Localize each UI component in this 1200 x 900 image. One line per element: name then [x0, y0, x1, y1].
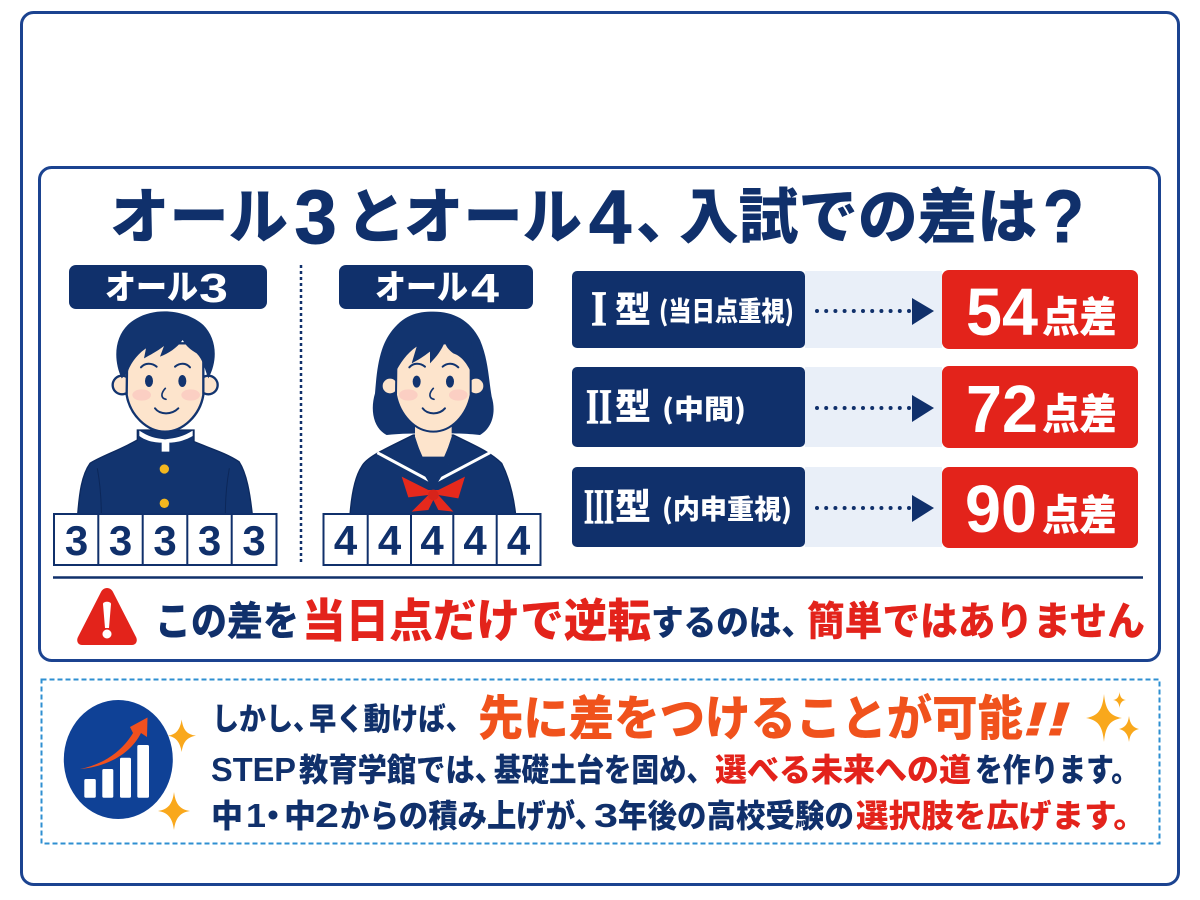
grade boxes: 4 4 4 4 4: 4 [420, 517, 444, 564]
grade boxes: 3 3 3 3 3: 3 [109, 517, 132, 564]
row: type I, 54 point gap: 型 [615, 281, 651, 333]
row: type I, 54 point gap: 54 [966, 275, 1038, 350]
student: all 3 [54, 260, 276, 565]
row: type I, 54 point gap [572, 270, 1138, 350]
grade boxes: 3 3 3 3 3: 3 [153, 517, 177, 564]
label: all 4 [339, 260, 533, 311]
grade boxes: 3 3 3 3 3: 3 [198, 517, 221, 564]
message line 3: 3 [594, 797, 618, 834]
row: type I, 54 point gap: (当日点重視) [659, 290, 794, 329]
message line 3: ・ [257, 791, 289, 837]
grade boxes: 4 4 4 4 4: 4 [378, 517, 402, 564]
grade boxes: 4 4 4 4 4 [324, 514, 540, 565]
message line 2: STEP [211, 751, 296, 788]
warning message: 簡単ではありません [807, 589, 1145, 647]
student: all 4 [324, 260, 540, 565]
title: 3 [294, 175, 337, 260]
message line 2 [211, 745, 1139, 791]
row: type II, 72 point gap: 72 [966, 372, 1038, 447]
message line 3: 選択肢を広げます。 [856, 791, 1146, 837]
message line 3: 年後の高校受験の [618, 791, 854, 837]
grade boxes: 4 4 4 4 4: 4 [463, 517, 487, 564]
icon: warning triangle [77, 588, 137, 645]
message line 2: 選べる未来への道 [715, 745, 971, 791]
message line 1: 早く動けば、 [309, 694, 473, 739]
grade boxes: 3 3 3 3 3: 3 [65, 517, 88, 564]
label: all 3 [69, 260, 267, 311]
row: type I, 54 point gap: I [591, 280, 607, 336]
message line 3: 中 [211, 791, 243, 837]
message line 2: 教育学館では、 [299, 745, 504, 791]
panel: exam score comparison [40, 168, 1160, 660]
row: type III, 90 point gap: 型 [615, 478, 651, 530]
illustration: boy in school uniform [78, 311, 252, 515]
message line 2: 基礎土台を固め、 [494, 745, 714, 791]
divider between students [300, 265, 302, 565]
grade boxes: 4 4 4 4 4: 4 [334, 517, 358, 564]
row: type II, 72 point gap: (中間) [662, 388, 746, 427]
icon: sparkles right [1086, 692, 1139, 742]
warning message [155, 585, 1145, 651]
grade boxes: 3 3 3 3 3: 3 [242, 517, 266, 564]
label: all 3: オール [105, 260, 198, 309]
row: type II, 72 point gap: 型 [615, 378, 651, 430]
title: オール [404, 169, 582, 256]
title [110, 169, 1084, 260]
row: type III, 90 point gap: (内申重視) [662, 488, 792, 527]
warning message: この差を [155, 589, 299, 647]
message line 1: しかし、 [212, 694, 320, 739]
grade boxes: 4 4 4 4 4: 4 [507, 517, 531, 564]
message line 3: からの積み上げが、 [340, 791, 604, 837]
illustration: girl in sailor uniform [350, 312, 516, 515]
icon: sparkles near chart [158, 720, 196, 830]
row: type II, 72 point gap: II [586, 378, 612, 434]
label: all 4: オール [375, 260, 468, 309]
message line 1 [212, 679, 1070, 749]
row: type II, 72 point gap [572, 366, 1138, 448]
row: type III, 90 point gap: 90 [965, 472, 1037, 547]
message line 3: 中 [284, 791, 316, 837]
row: type III, 90 point gap: III [584, 478, 614, 534]
message line 2: を作ります。 [975, 745, 1139, 791]
label: all 3: 3 [199, 265, 228, 311]
title: と [346, 169, 406, 256]
row: type II, 72 point gap: 点差 [1042, 381, 1117, 442]
icon: rising bar chart [64, 700, 173, 819]
title: オール [110, 169, 288, 256]
message line 3: 2 [315, 797, 339, 834]
message line 1: !! [1024, 693, 1070, 745]
grade boxes: 3 3 3 3 3 [54, 514, 276, 565]
row: type I, 54 point gap: 点差 [1042, 284, 1117, 345]
message line 1: 先に差をつけることが可能 [478, 679, 1023, 749]
row: type III, 90 point gap [572, 467, 1138, 548]
title: ? [1043, 175, 1084, 258]
title: 4 [589, 175, 631, 260]
message line 3 [211, 791, 1146, 837]
title: 、 [636, 169, 696, 256]
row: type III, 90 point gap: 点差 [1042, 482, 1117, 543]
message line 3: 1 [246, 797, 266, 834]
warning message: するのは、 [651, 595, 814, 646]
title: 入試での差は [679, 169, 1037, 256]
panel: early start message [42, 679, 1160, 844]
warning message: 当日点だけで逆転 [302, 585, 651, 651]
label: all 4: 4 [471, 265, 499, 311]
